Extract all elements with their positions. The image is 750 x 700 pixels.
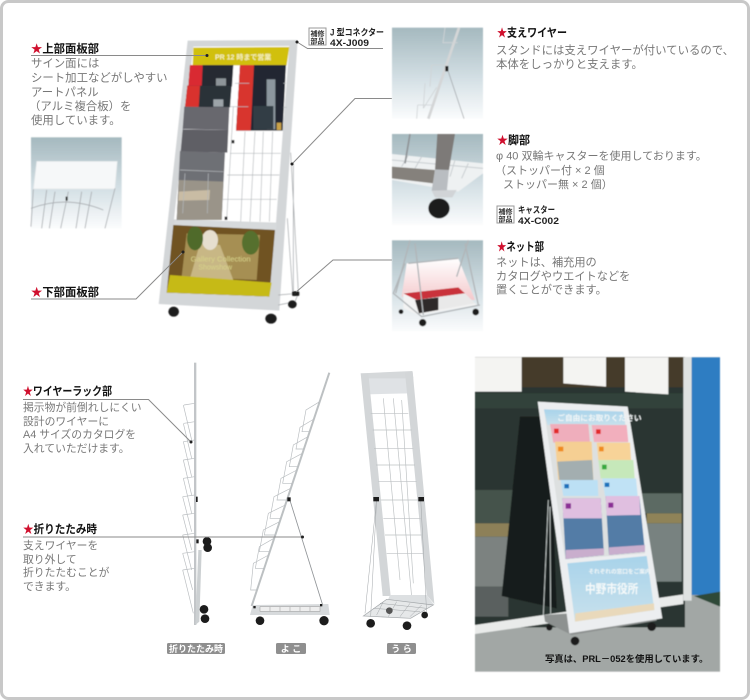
photographed stand (538, 402, 662, 645)
part badge: caster: 4X-C002 (518, 216, 559, 226)
casters (168, 291, 299, 324)
thumbnail: support wire detail (392, 28, 483, 119)
view label: back (387, 643, 416, 654)
text: support wire: スタンドには支えワイヤーが付いているので、 (496, 43, 734, 57)
view label: folded: 折りたたみ時 (169, 643, 223, 654)
text: caster: ストッパー無 × 2 個） (503, 177, 613, 191)
lower panel photo (167, 225, 275, 297)
part badge: J connector (309, 26, 384, 48)
part badge: caster (497, 204, 559, 226)
wire rack pockets (180, 83, 287, 222)
text: folded: できます。 (23, 580, 76, 593)
thumbnail: upper panel detail (31, 137, 122, 228)
top sign panel (193, 47, 289, 65)
thumbnail: caster detail (392, 134, 483, 225)
heading: upper panel: ★上部面板部 (31, 42, 99, 56)
brochures in rack (177, 65, 286, 220)
view label: side (276, 643, 306, 654)
lower panel photo: Showshow (198, 264, 233, 271)
part badge: J connector: 4X-J009 (330, 38, 369, 48)
text: folded: 折りたたむことが (23, 565, 110, 579)
photo caption: 写真は、PRL－052を使用しています。 (545, 653, 708, 664)
text: upper panel: 使用しています。 (31, 113, 121, 127)
text: wire rack: 掲示物が前倒れしにくい (23, 400, 142, 414)
view label: side: よ こ (281, 644, 301, 654)
part badge: caster: キャスター (518, 204, 555, 215)
photographed stand: それぞれの窓口をご案内 (588, 567, 651, 575)
text: net: ネットは、補充用の (496, 256, 597, 269)
black wire clips (225, 140, 234, 220)
photographed stand: 中野市役所 (585, 581, 638, 596)
thumbnail: net detail (392, 240, 483, 331)
heading: folded: ★折りたたみ時 (23, 522, 97, 536)
stand: side view (250, 373, 330, 625)
top sign panel: PR 12 時まで営業 (215, 52, 271, 61)
text: wire rack: A4 サイズのカタログを (23, 427, 136, 441)
text: upper panel: サイン面には (31, 57, 99, 70)
leader lines for main stand (31, 40, 392, 299)
heading: caster: ★脚部 (497, 133, 530, 147)
support wires (278, 153, 298, 305)
leader lines for lower stands (23, 400, 304, 538)
text: wire rack: 設計のワイヤーに (23, 415, 109, 428)
photographed stand: ご自由にお取りください (557, 413, 642, 423)
text: upper panel: シート加工などがしやすい (31, 70, 168, 84)
text: caster: φ 40 双輪キャスターを使用しております。 (496, 150, 707, 162)
part badge: J connector: 部品 (310, 36, 324, 46)
text: upper panel: アートパネル (31, 86, 99, 99)
heading: lower panel: ★下部面板部 (31, 285, 99, 299)
part badge: caster: 部品 (498, 214, 512, 224)
part badge: J connector: J 型コネクター (330, 26, 384, 38)
stand: folded view (183, 363, 212, 625)
text: folded: 取り外して (23, 553, 77, 566)
text: upper panel: （アルミ複合板）を (29, 99, 131, 113)
part badge: caster: 補修 (498, 207, 512, 216)
installation photo (475, 357, 720, 672)
text: caster: （ストッパー付 × 2 個 (495, 164, 605, 177)
text: net: カタログやウエイトなどを (496, 269, 630, 283)
part badge: J connector: 補修 (310, 29, 324, 38)
heading: support wire: ★支えワイヤー (497, 26, 567, 40)
heading: wire rack: ★ワイヤーラック部 (23, 384, 112, 398)
product photo: main stand (159, 40, 299, 324)
text: support wire: 本体をしっかりと支えます。 (496, 57, 643, 71)
stand: back view (361, 371, 434, 630)
text: net: 置くことができます。 (496, 282, 607, 296)
text: folded: 支えワイヤーを (23, 539, 98, 552)
heading: net: ★ネット部 (497, 240, 544, 254)
window reflection (475, 357, 685, 634)
text: wire rack: 入れていただけます。 (23, 442, 130, 455)
lower panel photo: Gallery Collection (191, 254, 251, 263)
view label: back: う ら (391, 644, 412, 654)
